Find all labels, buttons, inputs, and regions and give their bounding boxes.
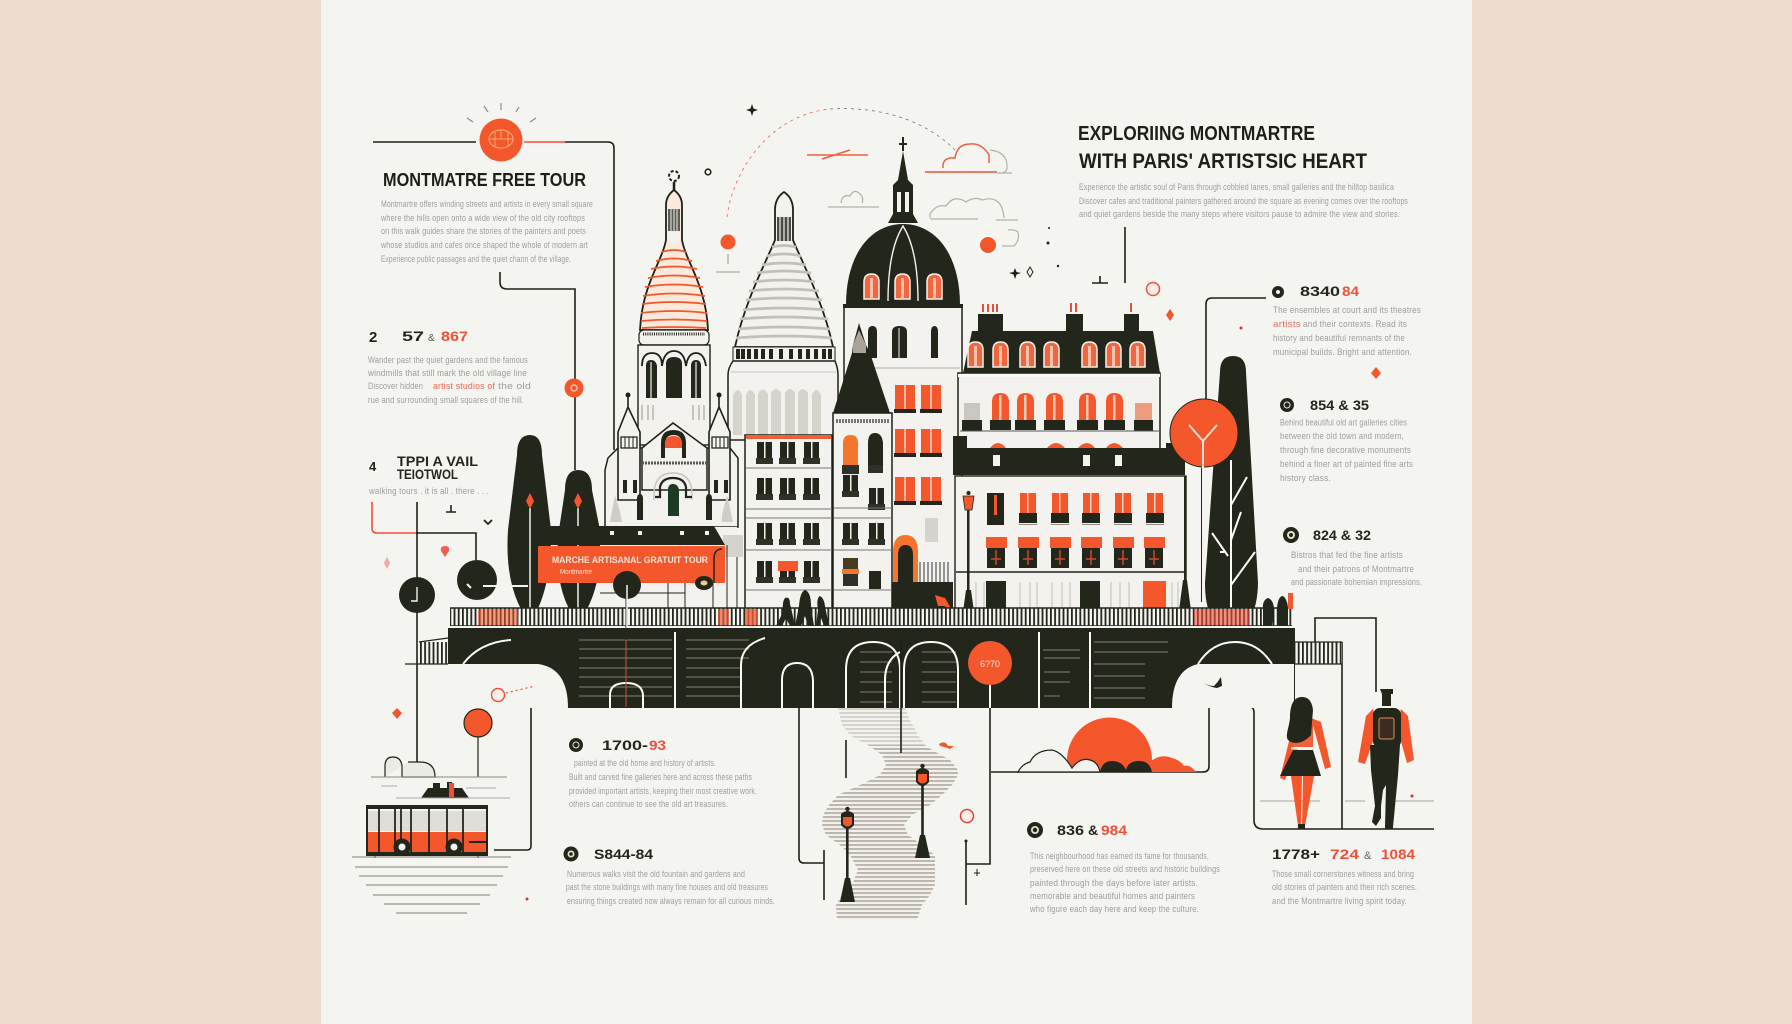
icon: road lamp right bbox=[915, 764, 930, 858]
text block: tour intro: whose studios and cafes once shaped the whole of modern art bbox=[380, 240, 588, 251]
section: bottom stop four: 1084 bbox=[1381, 846, 1415, 862]
icon: road lamp left bbox=[840, 807, 855, 902]
building: white dome bbox=[728, 192, 838, 440]
section: bottom stop one: 93 bbox=[649, 737, 666, 753]
road connector lines bbox=[846, 640, 901, 778]
section: stop two bbox=[367, 328, 531, 406]
section: stop two: 2 bbox=[369, 329, 377, 346]
section: bottom stop three: 984 bbox=[1101, 822, 1127, 838]
section: right stop three bbox=[1283, 527, 1422, 588]
section: right stop three: Bistros that fed the fine artists bbox=[1291, 550, 1403, 561]
icon: orange sign on bridge: 6?70 bbox=[980, 659, 1000, 669]
heading: tour title: MONTMATRE FREE TOUR bbox=[383, 170, 586, 190]
heading: main title bbox=[1078, 123, 1367, 173]
ground lines bbox=[1260, 800, 1434, 802]
tram ground stripes bbox=[352, 857, 511, 913]
icon: clock one bbox=[399, 577, 435, 613]
section: bottom stop four: 724 bbox=[1330, 846, 1359, 862]
section: bottom stop one: Built and carved fine galleries here and across these paths bbox=[569, 772, 752, 783]
section: bottom stop three: preserved here on these old streets and historic buildings bbox=[1030, 864, 1220, 875]
paper panel bbox=[321, 0, 1472, 1024]
banner: orange sign: MARCHE ARTISANAL GRATUIT TOUR bbox=[552, 555, 708, 566]
section: right stop one: artists bbox=[1273, 319, 1301, 330]
icon: orange pin bbox=[464, 709, 492, 777]
icon: node bbox=[564, 378, 584, 398]
building: black dome tower bbox=[843, 137, 963, 622]
section: bottom stop four: 1778+ bbox=[1272, 846, 1320, 862]
building: pointed tower bbox=[833, 323, 892, 623]
section: bottom stop three: This neighbourhood has earned its fame for thousands, bbox=[1030, 851, 1209, 862]
icon: small marks bbox=[446, 505, 492, 524]
section: stop two: rue and surrounding small squares of the hill. bbox=[368, 395, 524, 406]
banner: orange sign: Montmartre bbox=[560, 569, 592, 576]
section: right stop one: history and beautiful remnants of the bbox=[1273, 333, 1405, 344]
section: right stop one: The ensembles at court and its theatres bbox=[1273, 305, 1421, 316]
section: bottom stop one: 1700- bbox=[602, 737, 648, 753]
red dot bbox=[1410, 794, 1414, 798]
section: bottom stop four: Those small cornerstones witness and bring bbox=[1272, 869, 1414, 880]
section: bottom stop two: past the stone buildings with many fine houses and old treasures bbox=[566, 882, 768, 893]
icon: orange sign on bridge bbox=[968, 641, 1012, 685]
section: stop two: the old bbox=[498, 381, 531, 392]
section: stop two: 867 bbox=[441, 328, 468, 344]
figure: man with backpack bbox=[1358, 689, 1414, 829]
heading: main title: EXPLORIING MONTMARTRE bbox=[1078, 123, 1315, 145]
section: bottom stop four: old stories of painters and their rich scenes. bbox=[1272, 882, 1417, 893]
bridge: arcade base bbox=[448, 627, 1295, 708]
bridge: side arcs and railings bbox=[405, 598, 1342, 707]
section: bottom stop one: painted at the old home and history of artists. bbox=[574, 758, 716, 769]
section: bottom stop three: who figure each day here and keep the culture. bbox=[1029, 904, 1199, 915]
section: bottom stop three: painted through the days before later artists. bbox=[1030, 878, 1198, 889]
cutout: left lawn bbox=[418, 664, 568, 708]
building: large mansard block bbox=[953, 303, 1186, 626]
section: right stop two: 854 & 35 bbox=[1310, 397, 1369, 413]
section: right stop one bbox=[1272, 283, 1421, 358]
text block: intro paragraph: Discover cafes and traditional painters gathered around the square as evening comes over the rooftops bbox=[1079, 196, 1408, 207]
section: right stop three: 824 & 32 bbox=[1313, 527, 1371, 543]
icon: tall trees bbox=[507, 435, 601, 623]
section: bottom stop two: ensuring things created now always remain for all curious minds. bbox=[567, 896, 775, 907]
section: bottom stop four: & bbox=[1364, 850, 1372, 862]
section: bottom stop two: S844-84 bbox=[594, 846, 653, 862]
section: right stop three: and their patrons of Montmartre bbox=[1298, 564, 1414, 575]
icon: clock two bbox=[457, 560, 528, 600]
section: bottom stop three: 836 bbox=[1057, 822, 1084, 838]
section: bottom stop two: Numerous walks visit the old fountain and gardens and bbox=[567, 869, 745, 880]
text block: tour intro: Experience public passages and the quiet charm of the village. bbox=[381, 254, 571, 265]
icon: small domes bbox=[371, 757, 507, 788]
connector lines bbox=[372, 142, 1434, 905]
section: right stop two: behind a finer art of painted fine arts bbox=[1280, 459, 1413, 470]
section: right stop three: and passionate bohemian impressions. bbox=[1291, 577, 1422, 588]
pavilion under banner bbox=[538, 526, 743, 622]
section: right stop one: 84 bbox=[1342, 283, 1359, 299]
cutout: right lawn bbox=[1172, 664, 1294, 708]
section: right stop two: between the old town and modern, bbox=[1280, 431, 1404, 442]
icon: street lamps on deck bbox=[961, 476, 1193, 626]
section: bottom stop one bbox=[569, 737, 757, 810]
section: right stop two: history class. bbox=[1280, 473, 1331, 484]
figure: woman bbox=[1280, 697, 1331, 829]
text block: tour intro: Montmartre offers winding streets and artists in every small square bbox=[381, 199, 593, 210]
text block: intro paragraph: Experience the artistic soul of Paris through cobbled lanes, small galleries and the hilltop basilica bbox=[1079, 182, 1394, 193]
section: stop four: TEIOTWOL bbox=[397, 466, 458, 482]
text block: tour intro: on this walk guides share the stories of the painters and poets bbox=[381, 226, 586, 237]
section: bottom stop three: memorable and beautiful homes and painters bbox=[1030, 891, 1195, 902]
illustration: sunset bbox=[1018, 718, 1196, 772]
section: right stop one: municipal builds. Bright and attention. bbox=[1273, 347, 1412, 358]
section: bottom stop three bbox=[1027, 822, 1220, 915]
building: sacre coeur church bbox=[605, 171, 738, 527]
section: bottom stop two bbox=[564, 846, 775, 907]
icon: tram bbox=[366, 782, 510, 858]
left lawn decorations bbox=[384, 546, 535, 900]
road decorations bbox=[939, 742, 980, 876]
section: stop four: walking tours . it is all . there . . . bbox=[368, 486, 489, 497]
section: right stop one: 8340 bbox=[1300, 283, 1340, 299]
section: stop four bbox=[368, 453, 489, 497]
text block: intro paragraph bbox=[1079, 182, 1408, 220]
section: stop two: windmills that still mark the old village line bbox=[367, 368, 527, 379]
section: bottom stop four: and the Montmartre living spirit today. bbox=[1272, 896, 1407, 907]
section: stop four: 4 bbox=[369, 459, 377, 474]
icon: sun badge bbox=[467, 103, 536, 162]
section: right stop two bbox=[1280, 397, 1413, 484]
section: right stop one: and their contexts. Read its bbox=[1303, 319, 1407, 330]
icon: circular tree with Y bbox=[1170, 356, 1258, 628]
railing and people bbox=[450, 590, 1293, 627]
banner: orange sign bbox=[538, 546, 725, 590]
section: stop two: artist studios of bbox=[433, 381, 495, 392]
text block: tour intro bbox=[380, 199, 593, 265]
section: bottom stop one: provided important artists, keeping their most creative work. bbox=[569, 786, 757, 797]
road: winding path bbox=[822, 708, 958, 920]
section: bottom stop one: others can continue to see the old art treasures. bbox=[569, 799, 728, 810]
section: stop two: Discover hidden bbox=[368, 381, 423, 392]
section: right stop two: Behind beautiful old art galleries cities bbox=[1280, 418, 1407, 428]
icon: bird bbox=[1203, 677, 1222, 688]
sky decorations bbox=[705, 104, 1381, 379]
section: bottom stop four bbox=[1272, 846, 1417, 907]
section: stop two: 57 bbox=[402, 328, 424, 344]
section: stop four: TPPI A VAIL bbox=[397, 453, 478, 469]
heading: main title: WITH PARIS' ARTISTSIC HEART bbox=[1079, 150, 1367, 173]
building: apartment block bbox=[745, 435, 832, 625]
text block: tour intro: where the hills open onto a wide view of the old city rooftops bbox=[380, 213, 585, 224]
text block: intro paragraph: and quiet gardens beside the many steps where visitors pause to admire the view and stories. bbox=[1079, 209, 1400, 220]
section: right stop two: through fine decorative monuments bbox=[1280, 445, 1411, 456]
section: bottom stop three: & bbox=[1088, 822, 1098, 838]
icon: dark sign bbox=[613, 571, 641, 628]
section: stop two: Wander past the quiet gardens and the famous bbox=[368, 355, 528, 366]
section: stop two: & bbox=[428, 333, 435, 344]
